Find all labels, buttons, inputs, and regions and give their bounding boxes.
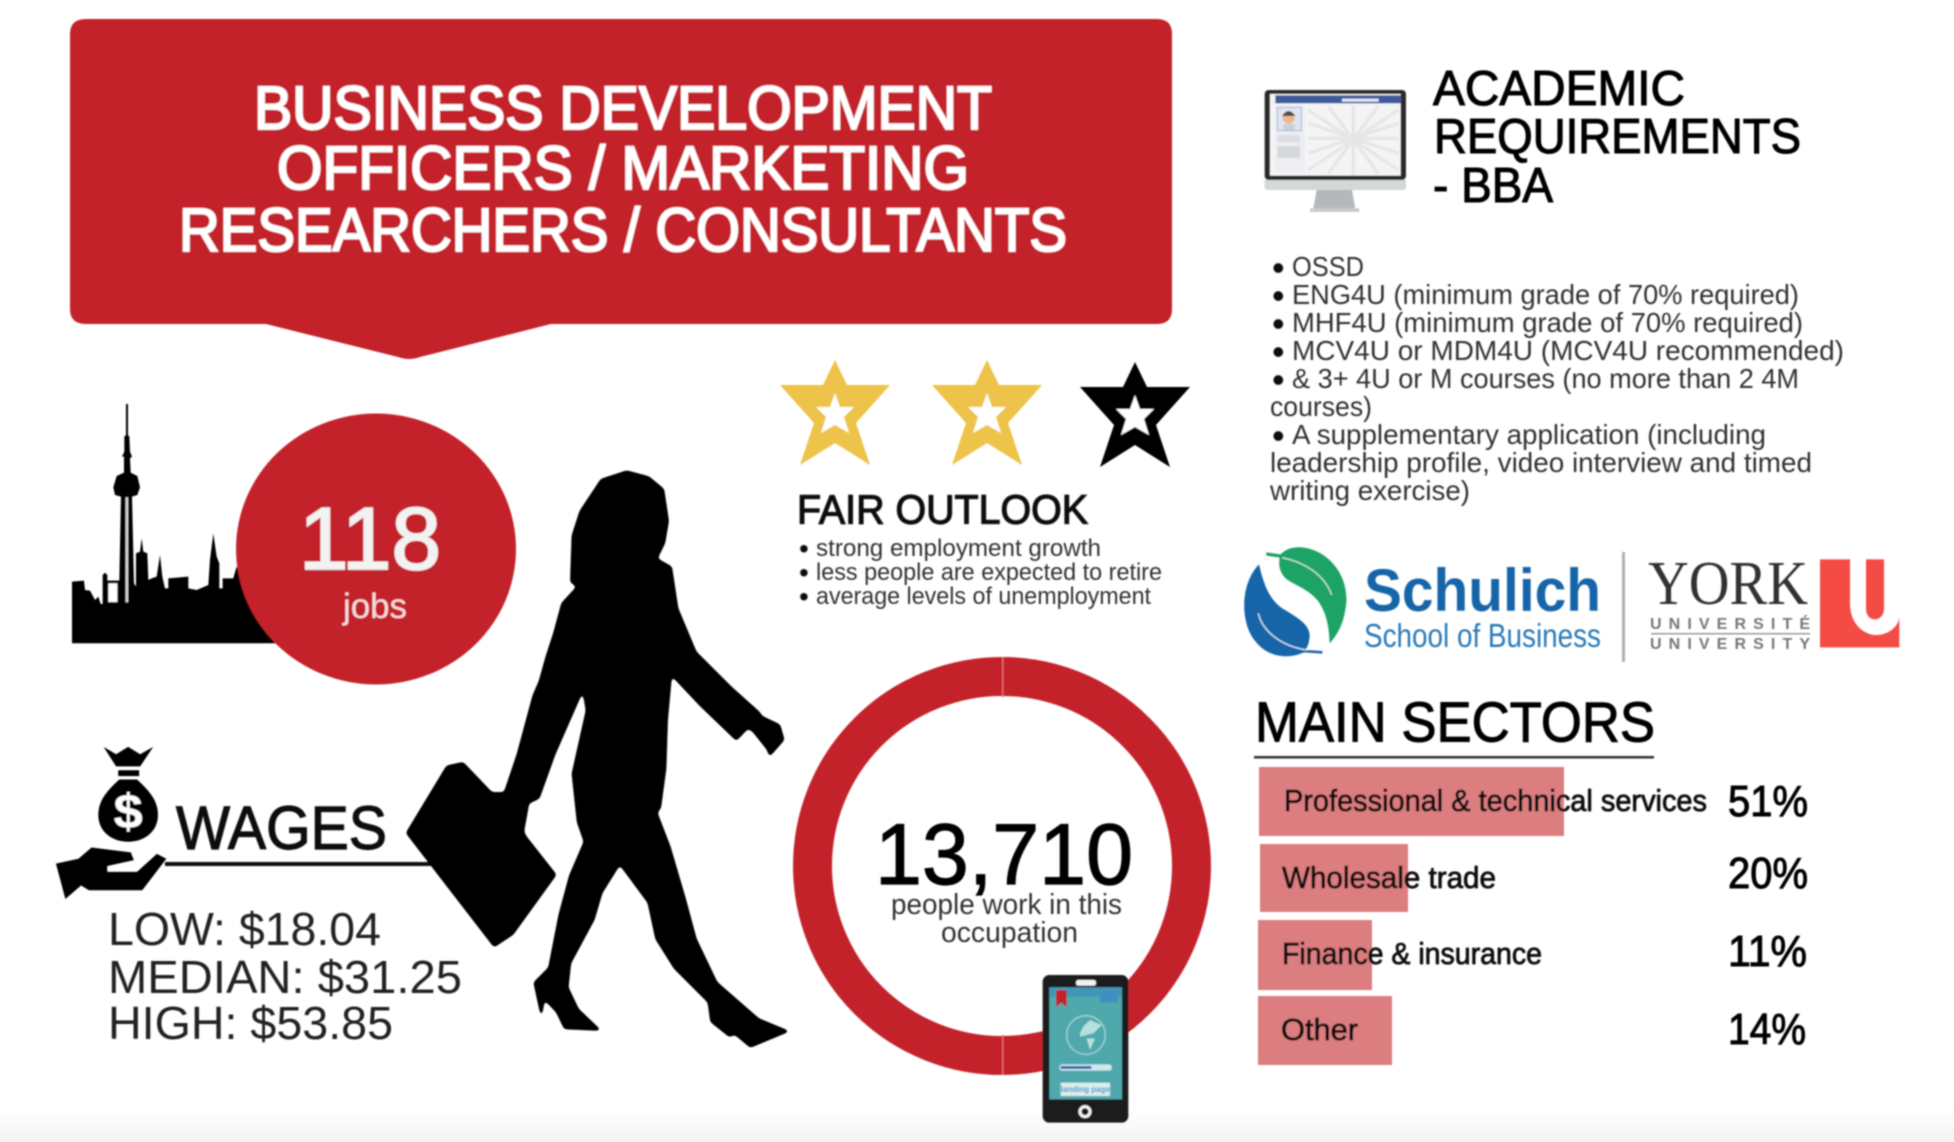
outlook rating stars — [780, 360, 1190, 467]
icon: city skyline — [72, 404, 280, 643]
title text — [179, 74, 1067, 264]
bar: professional and technical services: 51% — [1728, 777, 1808, 826]
academic requirements list: A supplementary application (including — [1292, 419, 1766, 450]
employment donut — [812, 657, 1192, 1075]
icon: smartphone: landing page — [1061, 1085, 1111, 1094]
wages figures: HIGH: $53.85 — [108, 997, 393, 1049]
Schulich wordmark — [1364, 557, 1601, 654]
academic requirements list: MCV4U or MDM4U (MCV4U recommended) — [1292, 335, 1844, 366]
outlook bullet list — [799, 533, 1162, 612]
employment caption — [891, 889, 1122, 949]
icon: money bag on hand — [56, 747, 166, 899]
wages figures: MEDIAN: $31.25 — [108, 951, 462, 1003]
wages figures: LOW: $18.04 — [108, 903, 381, 955]
academic requirements list: • — [1272, 247, 1285, 288]
York University wordmark: UNIVERSITY — [1650, 636, 1810, 653]
title text: BUSINESS DEVELOPMENT — [254, 74, 992, 142]
icon: gold star 1 — [780, 360, 890, 465]
academic requirements list: MHF4U (minimum grade of 70% required) — [1292, 307, 1803, 338]
jobs circle — [236, 414, 516, 684]
wages underline and heading: WAGES — [176, 794, 387, 862]
jobs label: jobs — [342, 587, 407, 626]
woman silhouette with briefcase — [407, 471, 788, 1047]
employment number: 13,710 — [875, 807, 1133, 903]
icon: black star — [1080, 362, 1190, 467]
icon: Schulich leaf logo — [1244, 547, 1346, 656]
bar: wholesale trade: Wholesale trade — [1282, 860, 1496, 895]
outlook bullet list: • — [799, 581, 809, 612]
York University wordmark: YORK — [1648, 550, 1808, 618]
academic requirements list: • — [1272, 359, 1285, 400]
academic requirements list: • — [1272, 275, 1285, 316]
academic requirements list: OSSD — [1292, 251, 1364, 282]
icon: money bag on hand: $ — [114, 784, 143, 839]
academic requirements list: ENG4U (minimum grade of 70% required) — [1292, 279, 1799, 310]
outlook bullet list: strong employment growth — [816, 535, 1101, 562]
bar: other: 14% — [1728, 1005, 1806, 1054]
bar: finance and insurance — [1258, 920, 1807, 990]
Schulich wordmark: Schulich — [1364, 557, 1601, 624]
academic requirements heading: REQUIREMENTS — [1434, 110, 1801, 164]
academic requirements list: • — [1272, 331, 1285, 372]
bar: finance and insurance: Finance & insurance — [1282, 936, 1542, 971]
bar: wholesale trade — [1260, 844, 1808, 912]
employment caption: people work in this — [891, 889, 1122, 921]
sector bar chart — [1258, 767, 1808, 1065]
York University wordmark: UNIVERSITÉ — [1650, 614, 1810, 633]
outlook bullet list: average levels of unemployment — [816, 583, 1151, 610]
outlook bullet list: • — [799, 533, 809, 564]
academic requirements list: courses) — [1270, 391, 1372, 422]
bar: wholesale trade: 20% — [1728, 849, 1808, 898]
academic requirements list: writing exercise) — [1269, 475, 1470, 506]
icon: York red U — [1820, 559, 1899, 647]
icon: desktop monitor — [1265, 90, 1406, 212]
outlook heading: FAIR OUTLOOK — [797, 486, 1088, 532]
title text: RESEARCHERS / CONSULTANTS — [179, 196, 1067, 264]
outlook bullet list: • — [799, 557, 809, 588]
bar: other: Other — [1281, 1012, 1358, 1047]
academic requirements list: • — [1272, 415, 1285, 456]
main sectors heading: MAIN SECTORS — [1255, 690, 1655, 754]
icon: gold star 2 — [932, 360, 1042, 465]
wages figures — [108, 903, 462, 1049]
academic requirements list — [1269, 247, 1844, 506]
Schulich wordmark: School of Business — [1364, 617, 1601, 654]
bar: other — [1258, 996, 1806, 1065]
academic requirements list: & 3+ 4U or M courses (no more than 2 4M — [1292, 363, 1799, 394]
academic requirements heading — [1433, 62, 1801, 213]
icon: smartphone — [1043, 975, 1128, 1123]
bar: finance and insurance: 11% — [1728, 927, 1807, 976]
academic requirements heading: ACADEMIC — [1433, 62, 1685, 116]
bar: professional and technical services — [1259, 767, 1808, 836]
title banner — [70, 19, 1172, 359]
outlook bullet list: less people are expected to retire — [816, 559, 1162, 586]
employment caption: occupation — [941, 917, 1078, 949]
York University wordmark — [1648, 550, 1810, 653]
logo divider — [1622, 552, 1625, 662]
jobs number: 118 — [299, 489, 441, 588]
academic requirements list: • — [1272, 303, 1285, 344]
academic requirements list: leadership profile, video interview and timed — [1270, 447, 1812, 478]
academic requirements heading: - BBA — [1433, 159, 1553, 213]
title text: OFFICERS / MARKETING — [277, 134, 969, 202]
bar: professional and technical services: Professional & technical services — [1284, 783, 1707, 818]
